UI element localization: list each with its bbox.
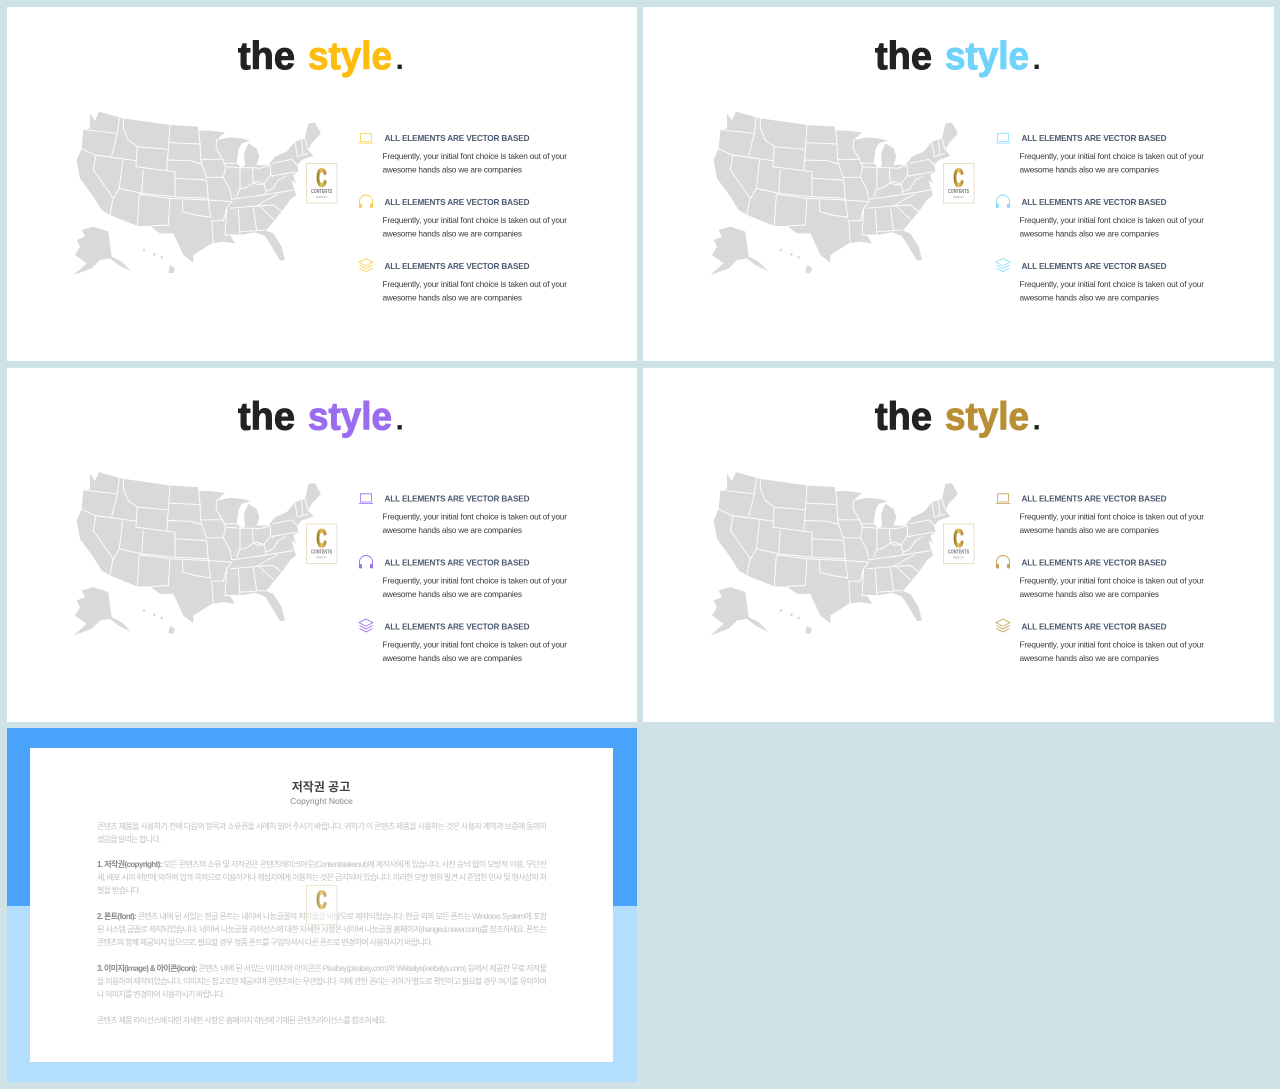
feature text 3: ALL ELEMENTS ARE VECTOR BASED [1022, 622, 1167, 632]
feature text 1: ALL ELEMENTS ARE VECTOR BASED [1022, 494, 1167, 504]
feature text 2 [382, 558, 567, 599]
logo watermark [944, 524, 974, 564]
notice section 3: images and icons: 나 이미지를 변경하여 사용하시기 바랍니다. [97, 989, 225, 999]
notice section 3: images and icons [97, 963, 547, 999]
logo watermark: C [316, 886, 326, 914]
feature text 2: Frequently, your initial font choice is taken out of your [382, 215, 567, 225]
notice section 2: fonts: 2. 폰트(font): 콘텐츠 내에 된 서있는 한글 폰트는 네이버 나눔글꼴의 저작물을 바탕으로 제작되었습니다. 한글 외의 모든 폰트는 Windows System에 포함 [97, 911, 548, 921]
feature text 3: ALL ELEMENTS ARE VECTOR BASED [1022, 262, 1167, 271]
feature text 1: ALL ELEMENTS ARE VECTOR BASED [384, 494, 530, 504]
notice section 1: copyright [97, 859, 547, 895]
feature text 2: Frequently, your initial font choice is taken out of your [1020, 576, 1204, 586]
icon: layers [359, 258, 373, 272]
logo watermark: FREE COPY [316, 556, 327, 560]
panel: copyright notice [7, 728, 637, 1082]
heading: copyright notice: Copyright Notice [290, 796, 353, 806]
icon: layers [996, 619, 1010, 632]
title: the style yellow: style [308, 35, 392, 78]
title: the style sky blue: style [945, 35, 1029, 78]
title: the style sky blue: the [875, 35, 932, 78]
feature text 1: ALL ELEMENTS ARE VECTOR BASED [1022, 134, 1167, 143]
icon: headphones [359, 195, 373, 208]
panel: gold slide [643, 368, 1274, 722]
feature text 3 [382, 262, 567, 302]
feature text 3: ALL ELEMENTS ARE VECTOR BASED [384, 262, 530, 271]
panel: sky blue slide [643, 7, 1274, 361]
logo watermark: CONTENTS [948, 189, 970, 195]
title: the style purple: the [238, 396, 295, 438]
feature text 1: awesome hands also we are companies [382, 164, 522, 174]
icon: laptop [996, 494, 1010, 504]
feature text 1 [1020, 134, 1204, 174]
notice section 3: images and icons: 을 이용하여 제작되었습니다. 이미지는 참고로만 제공되며 콘텐츠와는 무관합니다. 이에 관한 권리는 귀하가 별도로 확인하고 필요할 경우 여기를 유의하여 [97, 976, 547, 986]
notice section 1: copyright: 1. 저작권(copyright): 모든 콘텐츠의 소유 및 저작권은 콘텐츠테이크아웃(Contentstakeout)에 제작사에게 있습니다. 사전 승낙 없이 모방적 이용, 무단전 [97, 859, 547, 869]
feature text 2: Frequently, your initial font choice is taken out of your [1020, 215, 1204, 225]
feature text 2: awesome hands also we are companies [1020, 228, 1159, 238]
notice intro [97, 821, 548, 844]
notice section 1: copyright: 세, 배포 시의 위반에 의하여 엄격 목적으로 이용하거나 제삼자에게 이용하는 것은 금지되어 있습니다. 이러한 모방 행위 발견 시 준엄한 민사 및 형사상의 처 [97, 872, 547, 882]
title: the style yellow [238, 35, 404, 78]
title: the style sky blue [875, 35, 1041, 78]
icon: headphones [996, 195, 1010, 208]
feature text 2: awesome hands also we are companies [382, 228, 522, 238]
title: the style yellow: the [238, 35, 295, 78]
icon: layers [359, 619, 373, 632]
icon: laptop [359, 133, 373, 143]
feature text 3 [1020, 262, 1204, 302]
notice section 1: copyright: 벌을 받습니다. [97, 885, 141, 895]
notice intro: 콘텐츠 제품을 사용하기 전에 다음의 항목과 소유권을 사례히 읽어 주시기 바랍니다. 귀하가 이 콘텐츠 제품을 사용하는 것은 사용자 계약과 보증에 동의하 [97, 821, 548, 831]
title: the style gold: the [875, 396, 932, 438]
feature text 2: awesome hands also we are companies [1020, 589, 1159, 599]
map: United States [710, 112, 958, 275]
feature text 3: ALL ELEMENTS ARE VECTOR BASED [384, 622, 530, 632]
feature text 3: Frequently, your initial font choice is taken out of your [382, 279, 567, 289]
feature text 3 [1020, 622, 1204, 663]
feature text 1: awesome hands also we are companies [382, 525, 522, 535]
notice section 2: fonts: 된 시스템 글꼴로 제작되었습니다. 네이버 나눔글꼴 라이선스에 대한 자세한 사항은 네이버 나눔글꼴 홈페이지(hangeul.naver.com)를 참조하세요. 폰트는 [97, 924, 547, 934]
title: the style purple: . [396, 404, 404, 436]
logo watermark: FREE COPY [953, 556, 964, 560]
logo watermark: C [316, 525, 326, 553]
logo watermark: C [954, 525, 964, 553]
title: the style purple: style [308, 396, 392, 438]
feature text 1: Frequently, your initial font choice is taken out of your [382, 151, 567, 161]
feature text 2: ALL ELEMENTS ARE VECTOR BASED [1022, 198, 1167, 207]
feature text 1: awesome hands also we are companies [1020, 164, 1159, 174]
logo watermark [306, 886, 337, 924]
feature text 2: ALL ELEMENTS ARE VECTOR BASED [384, 198, 530, 207]
heading: copyright notice: 저작권 공고 [292, 779, 350, 794]
title: the style gold [875, 396, 1041, 438]
feature text 3: Frequently, your initial font choice is taken out of your [1020, 279, 1204, 289]
notice footer line: 콘텐츠 제품 라이선스에 대한 자세한 사항은 홈페이지 하단에 기재된 콘텐츠라이선스를 참조하세요. [97, 1015, 387, 1025]
feature text 2: ALL ELEMENTS ARE VECTOR BASED [1022, 558, 1167, 568]
feature text 1 [382, 494, 567, 535]
title: the style sky blue: . [1032, 43, 1041, 76]
title: the style gold: . [1032, 404, 1041, 436]
icon: headphones [359, 556, 373, 568]
feature text 3: awesome hands also we are companies [1020, 292, 1159, 302]
logo watermark: CONTENTS [311, 550, 333, 556]
map: United States [73, 472, 321, 635]
feature text 2 [382, 198, 567, 238]
notice section 2: fonts: 콘텐츠의 함께 제공되지 않으므로, 필요할 경우 정품 폰트를 구입하셔서 다른 폰트로 변경하여 사용하시기 바랍니다. [97, 937, 433, 947]
feature text 1: ALL ELEMENTS ARE VECTOR BASED [384, 134, 530, 143]
feature text 1: Frequently, your initial font choice is taken out of your [1020, 151, 1204, 161]
notice section 2: fonts [97, 911, 548, 947]
notice intro: 셨음을 알리는 합니다. [97, 834, 161, 844]
title: the style gold: style [945, 396, 1029, 438]
feature text 3: Frequently, your initial font choice is taken out of your [1020, 640, 1204, 650]
feature text 3: awesome hands also we are companies [1020, 653, 1159, 663]
logo watermark: CONTENTS [311, 189, 333, 195]
feature text 1: awesome hands also we are companies [1020, 525, 1159, 535]
icon: laptop [359, 494, 373, 504]
title: the style purple [238, 396, 404, 438]
feature text 1 [382, 134, 567, 174]
logo watermark [944, 164, 974, 203]
feature text 1: Frequently, your initial font choice is taken out of your [1020, 512, 1204, 522]
feature text 3: awesome hands also we are companies [382, 653, 522, 663]
feature text 2: ALL ELEMENTS ARE VECTOR BASED [384, 558, 530, 568]
icon: layers [996, 258, 1010, 272]
map: United States [73, 112, 321, 275]
panel: purple slide [7, 368, 637, 722]
panel: yellow slide [7, 7, 637, 361]
feature text 3 [382, 622, 567, 663]
feature text 1 [1020, 494, 1204, 535]
logo watermark: C [954, 164, 964, 192]
feature text 3: Frequently, your initial font choice is taken out of your [382, 640, 567, 650]
logo watermark: FREE COPY [953, 196, 964, 199]
feature text 3: awesome hands also we are companies [382, 292, 522, 302]
logo watermark: FREE COPY [316, 196, 327, 199]
logo watermark: CONTENTS [948, 550, 970, 556]
logo watermark [306, 524, 337, 564]
heading: copyright notice [290, 779, 353, 806]
feature text 2: awesome hands also we are companies [382, 589, 522, 599]
feature text 2 [1020, 558, 1204, 599]
map: United States [710, 472, 958, 635]
feature text 2: Frequently, your initial font choice is taken out of your [382, 576, 567, 586]
icon: headphones [996, 556, 1010, 568]
icon: laptop [996, 133, 1010, 143]
feature text 1: Frequently, your initial font choice is taken out of your [382, 512, 567, 522]
notice section 3: images and icons: 3. 이미지(image) & 아이콘(icon): 콘텐츠 내에 된 서있는 이미지와 아이콘은 Pixabay(pixabay.com)와 Webalys(webalys.com) 등에서 제공한 무료 저작물 [97, 963, 547, 973]
title: the style yellow: . [396, 43, 404, 76]
feature text 2 [1020, 198, 1204, 238]
logo watermark [306, 164, 337, 203]
logo watermark: C [316, 164, 326, 192]
